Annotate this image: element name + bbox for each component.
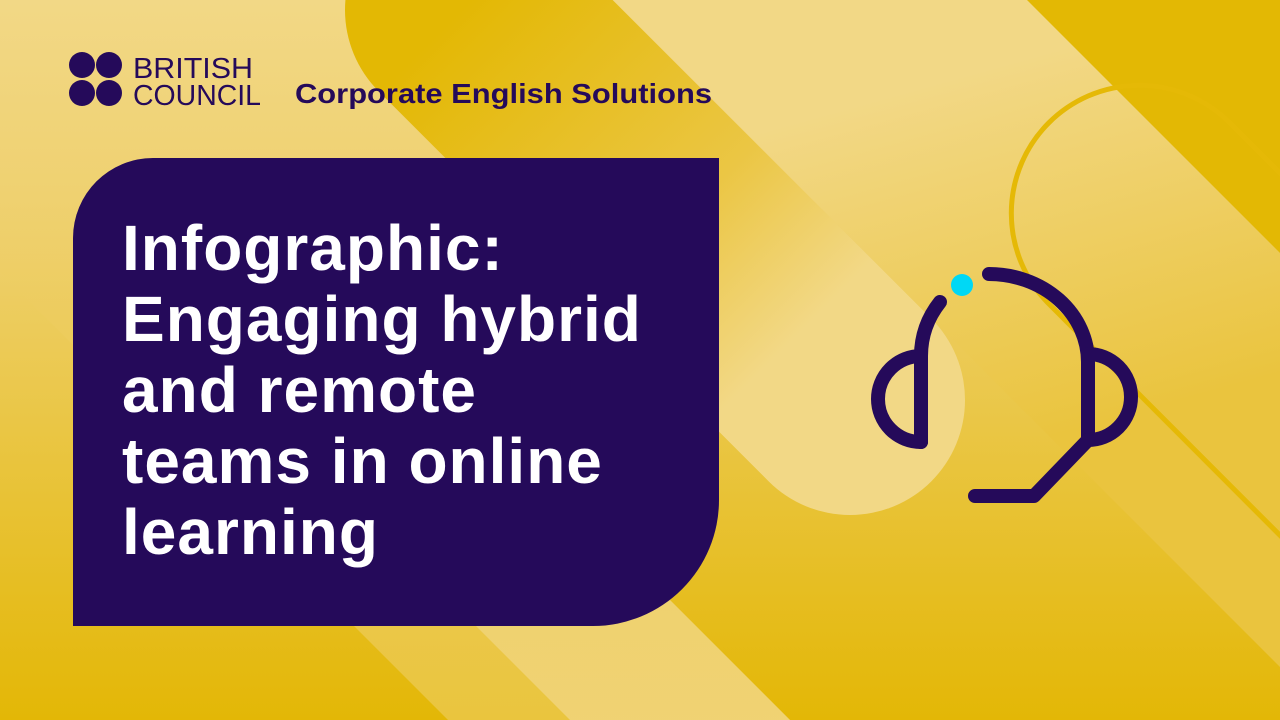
icon: headset (878, 274, 1131, 496)
title panel (73, 158, 719, 626)
logo: British Council: COUNCIL (133, 80, 261, 112)
title text: teams in online (122, 425, 603, 497)
title text: Engaging hybrid (122, 283, 642, 355)
subtitle: Corporate English Solutions: Corporate English Solutions (295, 78, 712, 109)
logo: British Council (69, 52, 261, 112)
title text: and remote (122, 354, 477, 426)
title text: Infographic: (122, 212, 504, 284)
logo: British Council: BRITISH (133, 53, 253, 85)
title text: learning (122, 496, 379, 568)
